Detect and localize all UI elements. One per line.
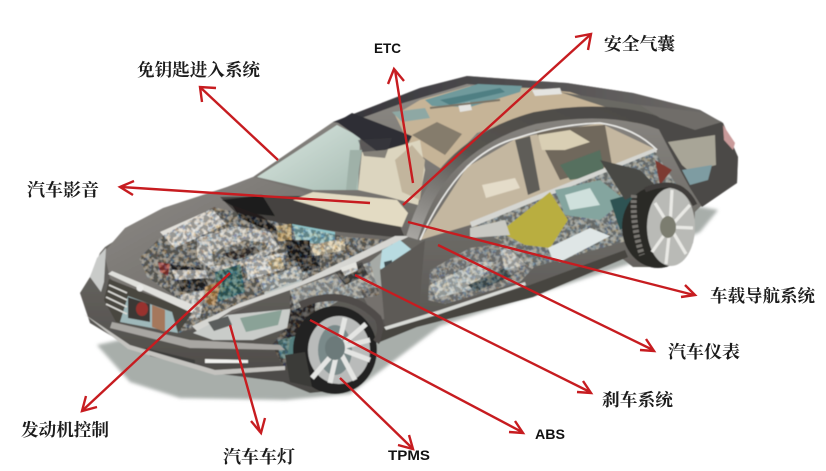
red arrows xyxy=(82,34,695,449)
grille xyxy=(104,271,196,333)
arrow: keyless entry xyxy=(200,87,278,160)
engine bay xyxy=(139,205,392,333)
cabin mechanics and yellow floor xyxy=(470,152,680,268)
left headlight xyxy=(90,248,106,292)
arrow: ABS xyxy=(310,320,523,433)
arrow: engine control xyxy=(82,273,230,411)
rear quarter xyxy=(640,105,738,207)
sun visor band xyxy=(337,113,412,152)
hood xyxy=(104,177,390,330)
car body silhouette xyxy=(80,76,738,393)
label: car lights: 汽车车灯 xyxy=(223,447,296,467)
roof interior and sunroof xyxy=(392,84,690,170)
front seats xyxy=(346,138,425,205)
arrow: TPMS xyxy=(340,378,413,449)
dashboard xyxy=(293,192,408,227)
arrow: car lights xyxy=(230,325,265,433)
arrow: car audio xyxy=(120,181,370,203)
fender mechanics xyxy=(272,240,420,370)
belt rail xyxy=(470,148,657,228)
label: ABS: ABS xyxy=(535,427,565,442)
windshield xyxy=(257,125,360,190)
cowl xyxy=(220,196,405,238)
front fender arch xyxy=(300,297,381,342)
right headlight xyxy=(193,309,290,340)
arrow: brake system xyxy=(355,275,591,393)
label: engine control: 发动机控制 xyxy=(21,420,109,440)
label: airbag: 安全气囊 xyxy=(604,34,676,54)
sill and lower door xyxy=(380,240,628,342)
label: navigation system: 车载导航系统 xyxy=(710,286,816,306)
arrow: airbag xyxy=(403,34,591,205)
door structure xyxy=(428,240,537,304)
front wheel xyxy=(285,306,377,394)
interior through side window xyxy=(420,123,657,240)
bumper lower trim xyxy=(84,314,285,375)
rear wheel xyxy=(622,185,695,268)
label: keyless entry: 免钥匙进入系统 xyxy=(137,60,262,80)
arrow: ETC xyxy=(388,69,413,183)
label: car audio: 汽车影音 xyxy=(27,180,99,200)
fender chrome stripe xyxy=(192,236,410,332)
label: ETC: ETC xyxy=(374,41,401,56)
car shadow xyxy=(97,205,718,400)
roof outer edge xyxy=(333,76,723,130)
roof pillar xyxy=(412,112,690,238)
engine bay texture xyxy=(139,207,392,333)
arrow: instrument cluster xyxy=(438,245,654,351)
label: brake system: 刹车系统 xyxy=(602,390,675,410)
car illustration xyxy=(80,76,738,400)
label: instrument cluster: 汽车仪表 xyxy=(668,342,741,362)
label: TPMS: TPMS xyxy=(388,448,430,463)
arrow: navigation xyxy=(408,222,695,297)
